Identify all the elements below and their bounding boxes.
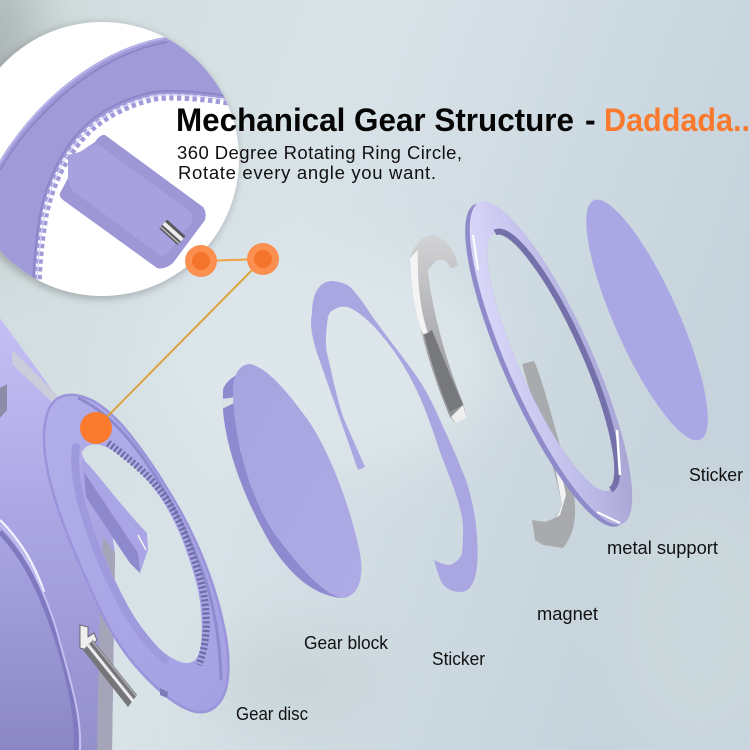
gear block disc xyxy=(222,364,361,598)
subtitle: Rotate every angle you want. xyxy=(178,162,436,183)
disc: notch xyxy=(160,688,168,698)
label: gear disc: Gear disc xyxy=(236,704,308,724)
disc: inner gear teeth xyxy=(108,443,206,665)
orange connector lines xyxy=(96,259,263,428)
magnet lower half xyxy=(522,361,575,548)
label: sticker right: Sticker xyxy=(689,465,743,485)
case: speaker detail xyxy=(0,384,7,418)
disc: gear block arm xyxy=(81,458,148,573)
hinge pin xyxy=(80,625,137,707)
magnet upper half xyxy=(410,235,467,423)
gear disc ring xyxy=(44,395,228,712)
block: face xyxy=(233,364,361,598)
label: gear block: Gear block xyxy=(304,633,389,653)
disc: outer rim xyxy=(44,395,228,712)
block: side rim xyxy=(223,374,340,598)
label: metal support: metal support xyxy=(607,538,718,558)
support: inner wall xyxy=(495,219,639,490)
subtitle: 360 Degree Rotating Ring Circle, xyxy=(177,142,462,163)
subtitle xyxy=(177,142,462,183)
sticker crescent xyxy=(311,281,478,592)
title: Mechanical Gear Structure xyxy=(176,102,574,138)
metal support ring xyxy=(436,185,661,543)
inset: ring band xyxy=(0,37,225,278)
sticker right xyxy=(564,187,730,453)
disc: inner step xyxy=(75,447,165,660)
phone case body xyxy=(0,318,115,750)
inset magnified detail circle xyxy=(0,22,260,300)
inset: gear teeth xyxy=(38,97,228,285)
title dash: - xyxy=(585,102,596,138)
inset: gear block card xyxy=(60,135,206,268)
label: magnet: magnet xyxy=(537,604,598,624)
case: camera ring inner xyxy=(0,527,76,750)
label: sticker center: Sticker xyxy=(432,649,485,669)
inset: metal pin xyxy=(159,220,186,245)
orange marker dots xyxy=(80,243,279,444)
